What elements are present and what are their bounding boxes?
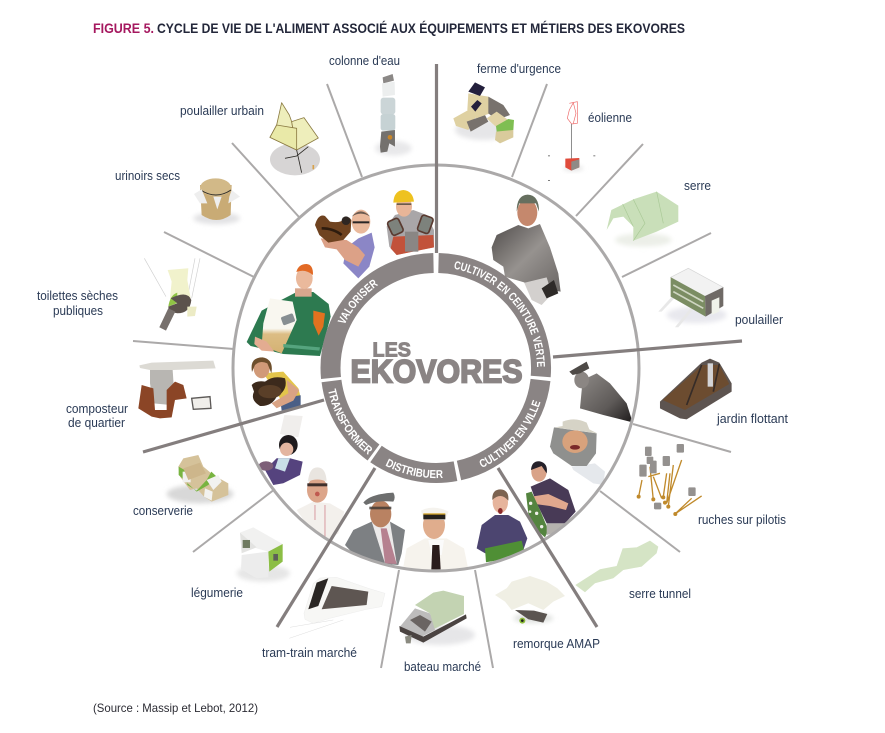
label: poulailler urbain: poulailler urbain [180,103,264,118]
thick sector dividers [143,64,742,627]
equipment: conserverie [167,455,233,503]
equipment: urinoirs secs [193,178,240,224]
person: man tending a climbing plant [526,461,576,537]
people: transformer sector [259,415,344,540]
central logo: les ekovores [350,339,522,390]
stage label: valoriser: VALORISER [338,280,378,323]
label: toilettes sèches publiques: toilettes sèches [37,288,118,303]
title: FIGURE 5. [93,21,154,36]
label: jardin flottant: jardin flottant [716,411,788,426]
equipment: colonne d'eau [375,74,412,156]
stage label: cultiver en ville: CULTIVER EN VILLE [480,400,540,467]
equipment: éolienne [548,102,595,181]
people: valoriser sector [247,190,434,411]
equipment: tram-train marché [289,577,385,638]
person: captain in white [403,508,468,572]
label: composteur de quartier: de quartier [68,415,126,430]
person: man carrying compost [252,357,301,411]
label: ferme d'urgence: ferme d'urgence [477,61,561,76]
person: surprised woman with tray of greens [477,489,527,562]
person: worker with yellow helmet [387,190,434,255]
person: man in grey suit and cap [345,493,405,565]
person: woman chef [259,415,303,485]
person: male chef [297,467,344,540]
equipment: jardin flottant [660,359,732,419]
label: colonne d'eau: colonne d'eau [329,53,400,68]
person: beekeeper with veil [550,419,605,485]
equipment: toilettes sèches publiques [144,258,200,331]
label: ruches sur pilotis: ruches sur pilotis [698,512,786,527]
label: serre tunnel: serre tunnel [629,586,691,601]
central ring with the five stages [320,253,552,483]
label: toilettes sèches publiques [37,288,118,318]
stage label: distribuer: DISTRIBUER [386,458,443,478]
label: composteur de quartier [66,401,129,430]
equipment: poulailler [658,268,727,327]
people: cultiver en ville sector [477,362,633,562]
stage label: transformer: TRANSFORMER [328,388,372,455]
person: man in knit sweater (cultiver en ceinture verte) [492,195,561,305]
equipment: ferme d'urgence [453,82,514,143]
label: conserverie: conserverie [133,503,193,518]
central logo: les ekovores: LES [372,339,411,362]
outer ring [233,165,639,571]
equipment: bateau marché [399,591,475,645]
label: urinoirs secs: urinoirs secs [115,168,180,183]
equipment: poulailler urbain [270,103,320,175]
title: CYCLE DE VIE DE L'ALIMENT ASSOCIÉ AUX ÉQUIPEMENTS ET MÉTIERS DES EKOVORES [157,21,685,36]
label: légumerie: légumerie [191,585,243,600]
label: tram-train marché: tram-train marché [262,645,357,660]
label: poulailler: poulailler [735,312,784,327]
label: remorque AMAP: remorque AMAP [513,636,600,651]
label: toilettes sèches publiques: publiques [53,303,103,318]
stage label: cultiver en ceinture verte: CULTIVER EN CEINTURE VERTE [454,261,545,367]
equipment: composteur de quartier [138,361,216,418]
person: man holding a hen [315,210,375,278]
person: old man in black and white [569,362,633,422]
thin divider lines between equipment [133,84,731,668]
central logo: les ekovores: EKOVORES [350,354,522,390]
person: man in green overalls with jerrycan [247,264,331,356]
equipment: serre tunnel [575,541,658,592]
label: serre: serre [684,178,711,193]
equipment: remorque AMAP [495,576,565,624]
equipment: serre [607,192,678,247]
label: éolienne: éolienne [588,110,632,125]
source note: (Source : Massip et Lebot, 2012) [93,701,258,715]
equipment: légumerie [237,527,290,582]
label: bateau marché: bateau marché [404,659,481,674]
equipment: ruches sur pilotis [637,444,702,516]
people: distribuer sector [345,493,468,572]
label: composteur de quartier: composteur [66,401,129,416]
